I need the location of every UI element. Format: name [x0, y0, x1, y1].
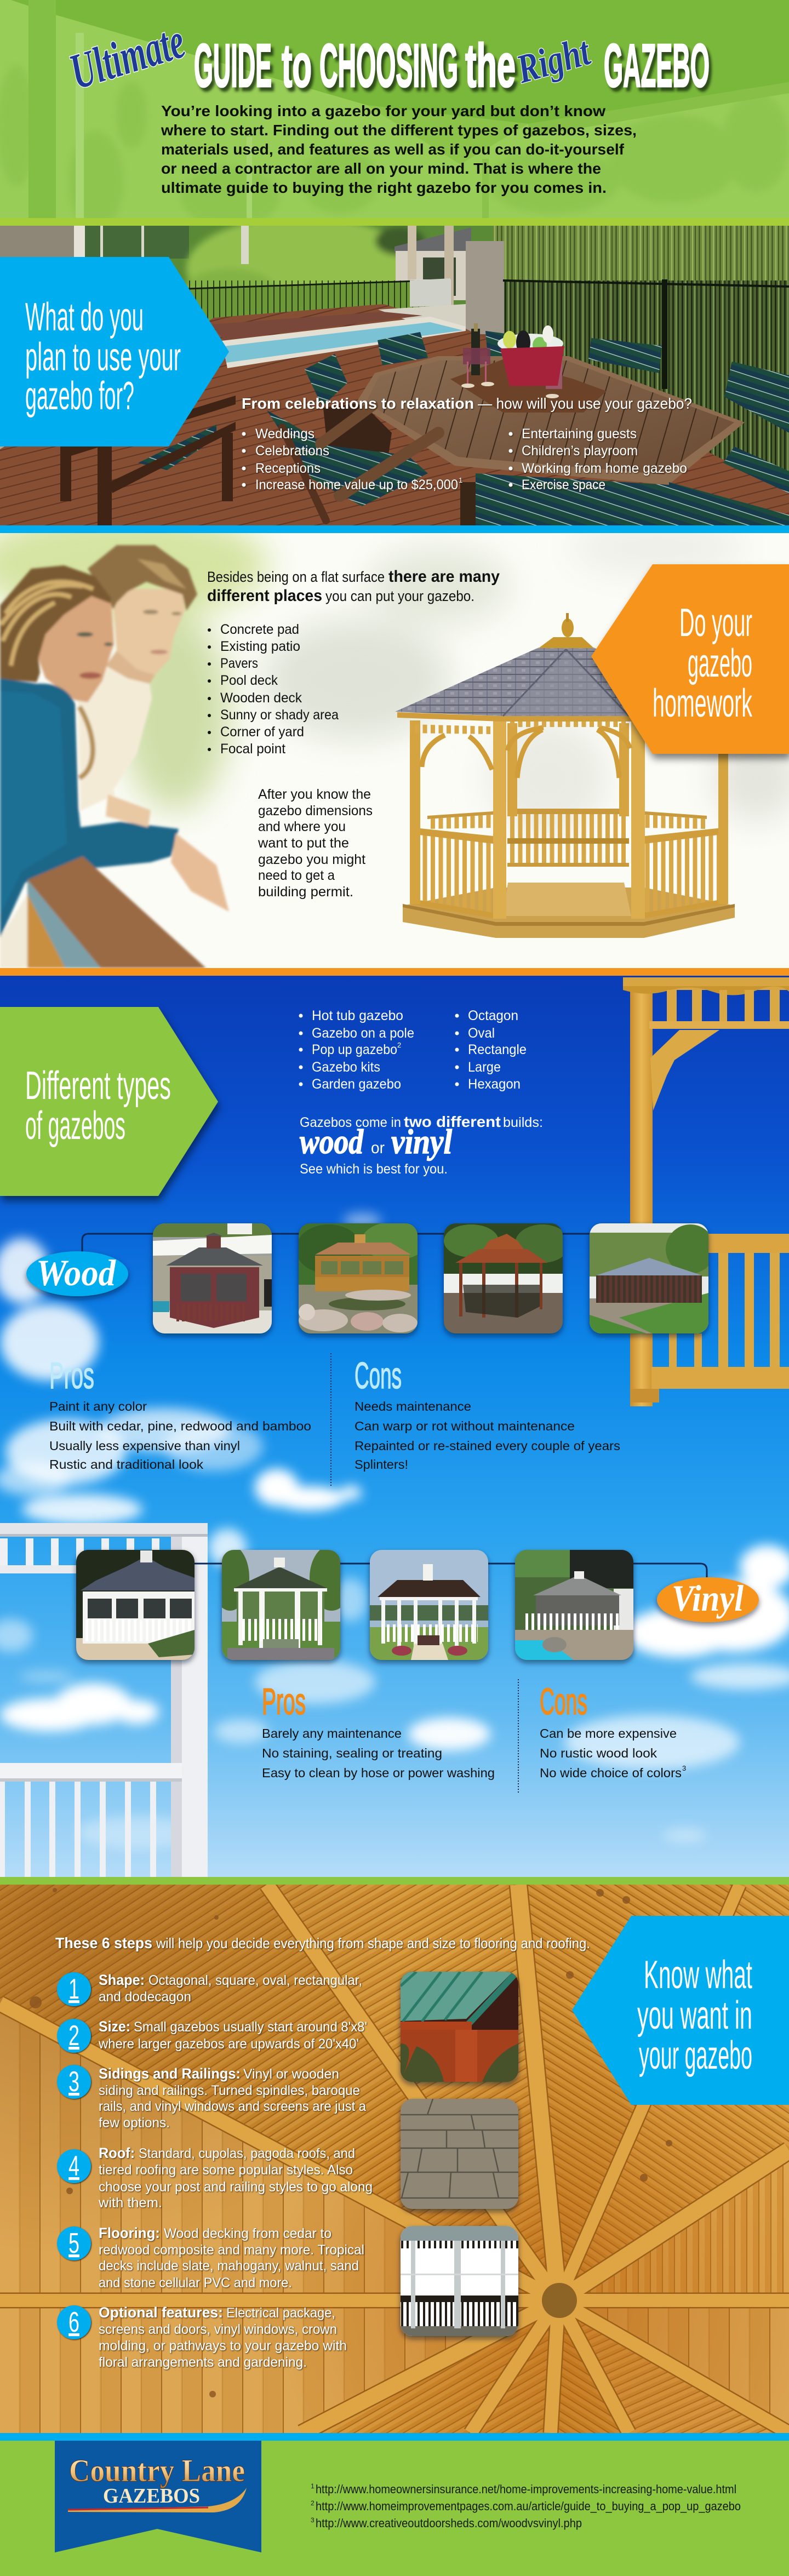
gazebo types list: Rectangle: [468, 1042, 527, 1057]
vinyl pros: Pros: [262, 1681, 306, 1722]
step 4: roof: choose your post and railing styles to go along: [99, 2179, 373, 2195]
step 3: sidings and railings: 3: [68, 2066, 79, 2098]
places list: [208, 622, 339, 757]
ice bucket: [498, 325, 564, 386]
wood cons: Cons: [355, 1355, 402, 1396]
wood ceiling: [0, 1885, 789, 2433]
two builds text: or: [371, 1139, 385, 1157]
step 1: shape: [57, 1972, 362, 2006]
posts: [410, 717, 728, 919]
step 4: roof: with them.: [98, 2195, 162, 2211]
step 4: roof: 4: [68, 2150, 79, 2182]
sources: 1: [311, 2482, 315, 2490]
sources: http://www.homeownersinsurance.net/home-improvements-increasing-home-value.html: [316, 2482, 736, 2496]
panel: know what you want in your gazebo: [0, 1885, 789, 2433]
places list: Pool deck: [220, 673, 278, 688]
wood pros: Usually less expensive than vinyl: [49, 1439, 240, 1453]
building permit note: want to put the: [258, 835, 349, 851]
photo: large screened gazebo: [590, 1223, 715, 1334]
uses list: Working from home gazebo: [522, 461, 687, 476]
vinyl gazebo photos: [76, 1545, 633, 1660]
step 4: roof: [57, 2145, 373, 2211]
step 6: optional features: floral arrangements and gardening.: [99, 2355, 307, 2370]
panel: do your gazebo homework: [0, 510, 789, 968]
panel: footer: [0, 2441, 789, 2576]
shingle roof: [395, 648, 729, 716]
wood badge: Wood: [36, 1252, 116, 1293]
intro text: ultimate guide to buying the right gazebo for you comes in.: [161, 179, 607, 196]
step 3: sidings and railings: rails, and vinyl windows and screens are just a: [99, 2099, 366, 2114]
photo: green metal roof timber frame: [401, 1972, 518, 2082]
bamboo screen: [493, 226, 789, 281]
wood pros: [49, 1355, 311, 1472]
wood frame: [623, 977, 789, 1406]
green arrow heading: [0, 1007, 218, 1196]
two builds text: vinyl: [391, 1122, 452, 1161]
couple photo: [0, 545, 229, 968]
places list: Existing patio: [220, 639, 300, 654]
step 5: flooring: Flooring:: [99, 2225, 160, 2241]
frieze: [410, 724, 490, 734]
photo: white screened gazebo: [76, 1550, 195, 1660]
step 2: size: [57, 2018, 367, 2053]
two builds text: See which is best for you.: [300, 1161, 448, 1177]
wood cons: Needs maintenance: [355, 1399, 471, 1413]
wood cons: Can warp or rot without maintenance: [355, 1419, 575, 1433]
step 6: optional features: [57, 2304, 347, 2370]
building permit note: gazebo you might: [258, 852, 365, 867]
title words: guide to choosing the: GUIDE: [194, 32, 272, 100]
vinyl cons: 3: [682, 1764, 686, 1772]
finial: [539, 613, 594, 648]
places intro: [207, 568, 500, 605]
places list: Sunny or shady area: [220, 707, 339, 723]
man: [78, 545, 197, 811]
left fence: [188, 278, 450, 320]
photo: cedar two-tier gazebo: [444, 1223, 570, 1334]
step 3: sidings and railings: siding and railings. Turned spindles, baroque: [99, 2083, 360, 2098]
step 5: flooring: [57, 2225, 364, 2291]
intro text: materials used, and features as well as if you can do-it-yourself: [161, 141, 625, 158]
uses intro: [242, 395, 692, 412]
panel: what do you plan to use your gazebo for: [0, 216, 789, 526]
step 5: flooring: 5: [68, 2228, 79, 2259]
braces and arches: [422, 728, 630, 778]
green arrow heading: Different types: [25, 1064, 171, 1108]
uses list: 1: [459, 476, 462, 484]
photo: garden gazebo with pond: [296, 1222, 427, 1334]
clouds: [0, 1213, 789, 1849]
step 1: shape: 1: [68, 1973, 79, 2005]
step 2: size: 2: [68, 2020, 79, 2052]
two builds text: two different: [404, 1113, 501, 1130]
building permit note: [258, 787, 373, 900]
uses intro: From celebrations to relaxation: [242, 395, 474, 412]
step list: [57, 1972, 373, 2370]
places intro: there are many: [388, 568, 500, 586]
places list: Wooden deck: [220, 690, 302, 706]
vinyl pros: No staining, sealing or treating: [262, 1746, 442, 1760]
uses list: Exercise space: [522, 477, 605, 493]
sources: http://www.creativeoutdoorsheds.com/woodvsvinyl.php: [316, 2516, 582, 2530]
vinyl pros: [262, 1681, 495, 1780]
places intro: you can put your gazebo.: [325, 588, 474, 604]
gazebo types list: Large: [468, 1060, 501, 1075]
wood cons: Repainted or re-stained every couple of years: [355, 1439, 620, 1453]
ceiling beams: [0, 1885, 789, 2433]
gazebo types list: Pop up gazebo: [312, 1042, 397, 1057]
blue arrow heading: [0, 257, 229, 446]
uses text: [242, 395, 692, 493]
building permit note: gazebo dimensions: [258, 803, 373, 818]
photo: brown screened gazebo: [153, 1223, 272, 1333]
logo banner: Country Lane: [69, 2453, 245, 2488]
step 3: sidings and railings: Sidings and Railings:: [99, 2065, 241, 2082]
title word: Right: Right: [511, 28, 596, 93]
step 6: optional features: Optional features:: [99, 2304, 223, 2321]
gazebo types list: Gazebo kits: [312, 1060, 380, 1075]
ceiling hub: [542, 2283, 577, 2318]
two builds text: Gazebos come in: [300, 1115, 401, 1130]
step 5: flooring: decks include slate, mahogany, walnut, sand: [99, 2258, 359, 2274]
wood connector line: [82, 1234, 592, 1252]
orange arrow heading: [591, 564, 789, 754]
places list: Concrete pad: [220, 622, 299, 637]
uses list: Weddings: [255, 426, 315, 442]
gazebo types list: 2: [397, 1041, 401, 1049]
vinyl cons: [540, 1681, 686, 1780]
gazebo floor: [403, 883, 735, 938]
vinyl connector line: [192, 1564, 707, 1578]
uses intro: — how will you use your gazebo?: [478, 395, 692, 412]
step 4: roof: Roof:: [99, 2145, 135, 2161]
panel: different types of gazebos: [0, 976, 789, 1877]
places list: Focal point: [220, 741, 285, 757]
photo: poolside white gazebo: [515, 1550, 633, 1660]
sources: 2: [311, 2499, 315, 2507]
two builds text: builds:: [503, 1115, 543, 1130]
two builds text: [300, 1113, 543, 1177]
step 1: shape: and dodecagon: [99, 1989, 191, 2005]
vinyl pros: Barely any maintenance: [262, 1726, 402, 1741]
wood gazebo photos: [153, 1222, 715, 1334]
uses list: Entertaining guests: [522, 426, 637, 442]
pillars: [0, 226, 504, 449]
blue arrow heading: [572, 1916, 789, 2105]
wood pros: Pros: [49, 1355, 94, 1396]
green arrow heading: of gazebos: [25, 1104, 125, 1148]
step 2: size: Small gazebos usually start around 8'x8': [134, 2019, 367, 2035]
uses list: Children’s playroom: [522, 443, 638, 459]
deck and pool: [0, 304, 789, 526]
blue arrow heading: plan to use your: [25, 335, 181, 379]
house behind pool: [395, 226, 471, 305]
gazebo types list: Oval: [468, 1026, 495, 1041]
photo: shingle roof: [401, 2099, 518, 2209]
uses list: [242, 426, 687, 493]
steps intro: These 6 steps: [55, 1934, 152, 1951]
step 6: optional features: Electrical package,: [226, 2305, 335, 2321]
title: [64, 13, 710, 100]
uses list: Increase home value up to $25,000: [255, 477, 458, 493]
right fence: [503, 279, 789, 389]
blue arrow heading: gazebo for?: [25, 374, 134, 418]
two builds text: wood: [300, 1122, 364, 1161]
gazebo types list: Hexagon: [468, 1077, 521, 1092]
building permit note: need to get a: [258, 868, 335, 883]
wooden gazebo: [395, 613, 735, 938]
wood pros: Paint it any color: [49, 1399, 147, 1413]
vinyl badge: Vinyl: [672, 1577, 744, 1619]
gazebo types list: Octagon: [468, 1008, 518, 1023]
title words: guide to choosing the: CHOOSING: [319, 32, 458, 100]
chairs in front: [60, 396, 789, 526]
step 2: size: where larger gazebos are upwards of 20'x40': [98, 2036, 359, 2052]
building permit note: After you know the: [258, 787, 371, 802]
step 4: roof: Standard, cupolas, pagoda roofs, and: [139, 2146, 355, 2161]
step 1: shape: Shape:: [99, 1972, 145, 1988]
building permit note: building permit.: [258, 884, 353, 900]
woman: [0, 565, 229, 938]
places intro: Besides being on a flat surface: [207, 569, 385, 585]
building permit note: and where you: [258, 819, 346, 834]
wood pros: Built with cedar, pine, redwood and bamboo: [49, 1419, 311, 1433]
places intro: different places: [207, 587, 322, 605]
step 3: sidings and railings: few options.: [99, 2115, 170, 2131]
vinyl cons: No wide choice of colors: [540, 1766, 682, 1780]
champagne and glasses: [461, 323, 562, 398]
vinyl cons: Cons: [540, 1681, 587, 1722]
blue arrow heading: What do you: [25, 295, 144, 339]
intro text: where to start. Finding out the different types of gazebos, sizes,: [161, 122, 637, 139]
photo: screened interior: [401, 2226, 518, 2336]
sources: http://www.homeimprovementpages.com.au/article/guide_to_buying_a_pop_up_gazebo: [316, 2499, 741, 2513]
step 5: flooring: Wood decking from cedar to: [164, 2226, 331, 2241]
table: [356, 356, 745, 485]
wood pros: Rustic and traditional look: [49, 1457, 204, 1472]
places list: Corner of yard: [220, 724, 304, 740]
logo banner: GAZEBOS: [103, 2485, 200, 2508]
sources: 3: [311, 2516, 315, 2524]
railing: [0, 856, 206, 968]
vinyl pros: Easy to clean by hose or power washing: [262, 1766, 495, 1780]
uses list: Receptions: [255, 461, 321, 476]
title words: guide to choosing the: to: [282, 32, 312, 100]
wood cons: [355, 1355, 620, 1472]
logo banner: [55, 2441, 261, 2552]
step 6: optional features: screens and doors, vinyl windows, crown: [99, 2322, 337, 2337]
step 6: optional features: 6: [68, 2306, 79, 2338]
white vinyl railing: [0, 1523, 208, 1877]
vinyl cons: Can be more expensive: [540, 1726, 677, 1741]
ceiling beam shadows: [0, 1885, 789, 2433]
step 3: sidings and railings: Vinyl or wooden: [243, 2066, 339, 2082]
gazebo types list: Garden gazebo: [312, 1077, 401, 1092]
wood cons: Splinters!: [355, 1457, 408, 1472]
photo: white octagon gazebo: [211, 1545, 353, 1660]
feature photos: [401, 1972, 518, 2336]
places list: Pavers: [220, 656, 258, 671]
chairs behind table: [305, 331, 789, 453]
photo: lakeside white gazebo: [370, 1550, 488, 1660]
gazebo types list: Hot tub gazebo: [312, 1008, 403, 1023]
step 5: flooring: and stone cellular PVC and more.: [99, 2275, 292, 2291]
steps intro: will help you decide everything from shape and size to flooring and roofing.: [156, 1935, 590, 1951]
step 1: shape: Octagonal, square, oval, rectangular,: [148, 1973, 362, 1988]
step 3: sidings and railings: [57, 2065, 366, 2131]
step 2: size: Size:: [99, 2018, 130, 2035]
step 5: flooring: redwood composite and many more. Tropical: [99, 2242, 364, 2258]
gazebo types list: Gazebo on a pole: [312, 1026, 414, 1041]
title words: guide to choosing the: [194, 32, 710, 100]
step 6: optional features: molding, or pathways to your gazebo with: [99, 2338, 347, 2354]
gazebo types list: [299, 1008, 527, 1092]
uses list: Celebrations: [255, 443, 329, 459]
title words: guide to choosing the: the: [465, 32, 516, 100]
panel: green header: [0, 0, 789, 230]
intro text: [161, 102, 637, 196]
step 4: roof: tiered roofing are some popular styles. Also: [99, 2162, 353, 2178]
intro text: or need a contractor are all on your mind. That is where the: [161, 160, 601, 177]
intro text: You’re looking into a gazebo for your yard but don’t know: [161, 102, 605, 119]
sources: [311, 2482, 741, 2530]
vinyl cons: No rustic wood look: [540, 1746, 658, 1760]
man's hand: [106, 794, 151, 827]
